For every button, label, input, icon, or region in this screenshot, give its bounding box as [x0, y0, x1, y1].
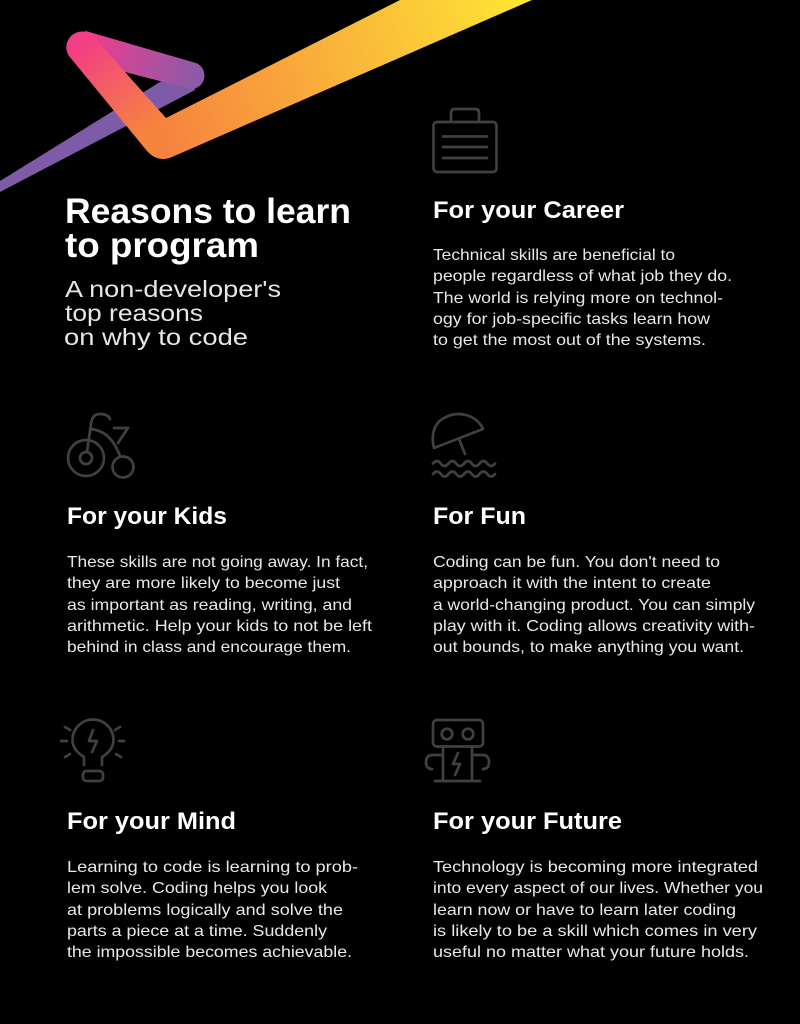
- ribbon graphic: [0, 0, 532, 192]
- heading: kids: For your Kids: [67, 503, 227, 530]
- text: kids: [67, 554, 373, 656]
- text: kids: they are more likely to become just: [67, 575, 341, 592]
- subtitle: [64, 276, 281, 350]
- text: kids: behind in class and encourage them.: [67, 639, 351, 656]
- title: to program: [65, 226, 259, 265]
- text: fun: out bounds, to make anything you want.: [433, 639, 744, 656]
- panel: mind: [67, 808, 358, 961]
- text: future: Technology is becoming more integrated: [433, 859, 758, 876]
- text: career: Technical skills are beneficial to: [433, 247, 675, 264]
- panel: fun: [433, 503, 755, 656]
- text: future: learn now or have to learn later coding: [433, 902, 736, 919]
- text: mind: parts a piece at a time. Suddenly: [67, 923, 327, 940]
- text: mind: lem solve. Coding helps you look: [67, 880, 328, 897]
- subtitle: on why to code: [64, 324, 248, 350]
- title: Reasons to learn: [65, 192, 351, 231]
- text: kids: These skills are not going away. In fact,: [67, 554, 368, 571]
- text: future: is likely to be a skill which comes in very: [433, 923, 757, 940]
- text: future: [433, 859, 763, 961]
- text: future: into every aspect of our lives. Whether you: [433, 880, 763, 897]
- heading: career: For your Career: [433, 197, 624, 224]
- text: fun: a world-changing product. You can simply: [433, 597, 755, 614]
- icon: light bulb: [61, 720, 124, 781]
- subtitle: A non-developer's: [65, 276, 281, 302]
- text: fun: play with it. Coding allows creativity with-: [433, 618, 755, 635]
- text: career: to get the most out of the systems.: [433, 332, 706, 349]
- text: mind: at problems logically and solve the: [67, 902, 343, 919]
- icon: briefcase: [434, 109, 496, 172]
- heading: future: For your Future: [433, 808, 622, 835]
- text: kids: arithmetic. Help your kids to not be left: [67, 618, 373, 635]
- icon: tricycle: [68, 414, 134, 478]
- subtitle: top reasons: [65, 300, 203, 326]
- text: career: [433, 247, 732, 349]
- text: mind: the impossible becomes achievable.: [67, 944, 352, 961]
- panel: career: [433, 197, 732, 349]
- heading: fun: For Fun: [433, 503, 526, 530]
- panel: kids: [67, 503, 373, 656]
- text: kids: as important as reading, writing, and: [67, 597, 352, 614]
- text: career: ogy for job-specific tasks learn how: [433, 311, 710, 328]
- heading: mind: For your Mind: [67, 808, 236, 835]
- text: career: people regardless of what job they do.: [433, 268, 732, 285]
- text: future: useful no matter what your future holds.: [433, 944, 749, 961]
- panel: future: [433, 808, 763, 961]
- icon: umbrella and waves: [433, 414, 495, 476]
- text: mind: [67, 859, 358, 961]
- text: mind: Learning to code is learning to prob-: [67, 859, 358, 876]
- title: [65, 192, 351, 265]
- text: fun: approach it with the intent to create: [433, 575, 711, 592]
- icon: robot: [426, 720, 489, 781]
- text: fun: Coding can be fun. You don't need to: [433, 554, 720, 571]
- text: career: The world is relying more on technol-: [433, 290, 723, 307]
- text: fun: [433, 554, 755, 656]
